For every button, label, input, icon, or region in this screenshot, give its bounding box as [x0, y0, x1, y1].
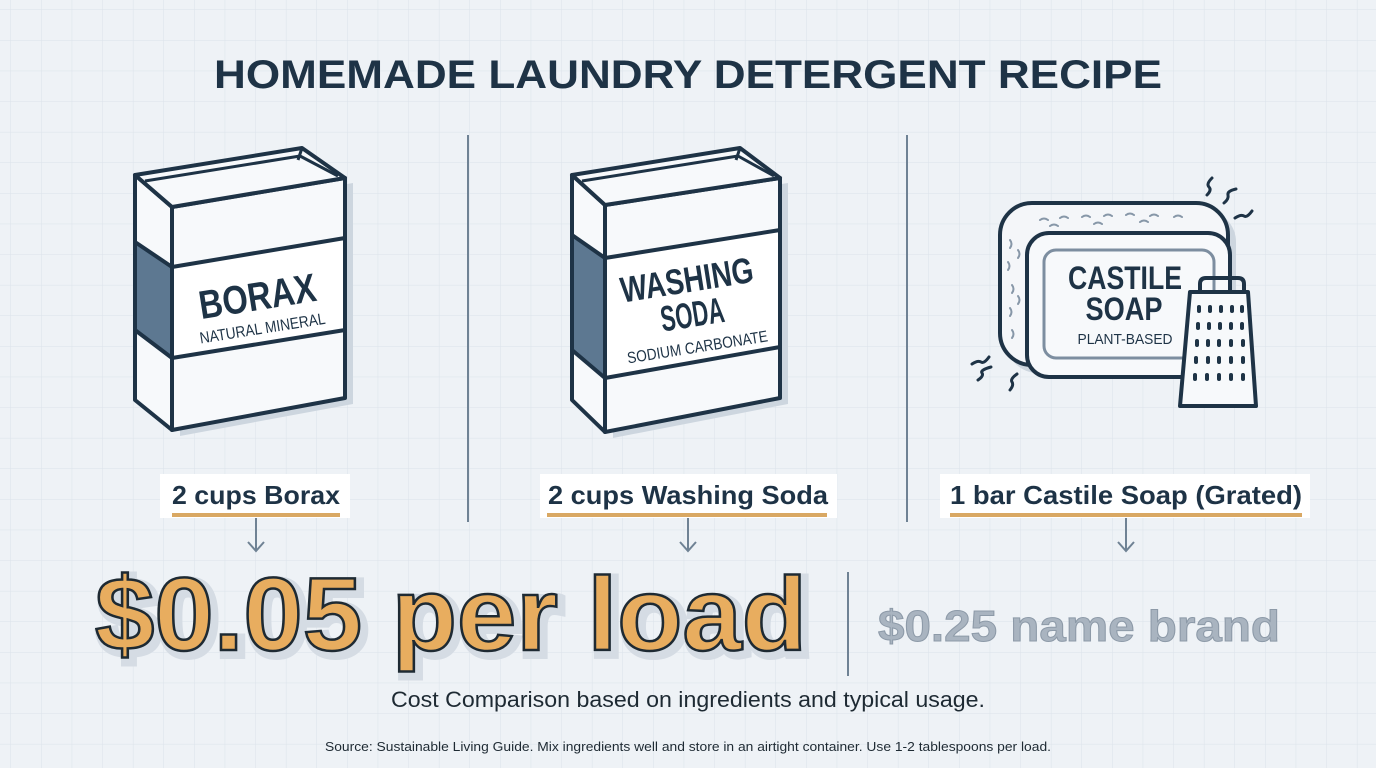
big price: $0.05 per load: $0.05 per load	[99, 561, 811, 677]
label: 2 cups Borax	[160, 474, 350, 518]
box label: washing soda	[613, 248, 769, 367]
label: 2 cups Borax: 2 cups Borax	[172, 480, 341, 510]
big price: $0.05 per load: $0.05 per load	[95, 557, 807, 673]
box label: borax	[191, 265, 327, 347]
box label: washing soda: WASHING	[617, 249, 756, 310]
icon: castile soap with grater: SOAP	[1086, 291, 1162, 327]
arrows	[248, 518, 1134, 551]
icon: washing soda box	[572, 148, 788, 438]
icon: castile soap with grater: PLANT-BASED	[1078, 331, 1173, 348]
label: 2 cups Washing Soda	[540, 474, 837, 518]
icon: castile soap with grater: CASTILE	[1068, 260, 1182, 296]
icon: borax box	[135, 148, 353, 436]
label: 2 cups Washing Soda: 2 cups Washing Soda	[548, 480, 829, 510]
motion squiggles	[972, 178, 1252, 390]
label: 1 bar Castile Soap	[940, 474, 1310, 518]
box label: borax: BORAX	[196, 266, 320, 328]
icon: castile soap with grater	[972, 178, 1256, 406]
box label: washing soda: SODA	[657, 289, 727, 340]
grater	[1200, 278, 1244, 290]
source note: Source: Sustainable Living Guide. Mix ingredients well and store in an airtight container. Use 1-2 tablespoons per load.	[325, 739, 1051, 754]
label: 1 bar Castile Soap: 1 bar Castile Soap (Grated)	[950, 480, 1302, 510]
name brand price: $0.25 name brand	[878, 602, 1280, 651]
caption: Cost Comparison based on ingredients and typical usage.	[391, 687, 985, 712]
box label: washing soda: SODIUM CARBONATE	[626, 328, 769, 367]
title: HOMEMADE LAUNDRY DETERGENT RECIPE	[214, 53, 1162, 97]
divider lines	[468, 135, 907, 676]
box label: borax: NATURAL MINERAL	[199, 311, 327, 347]
